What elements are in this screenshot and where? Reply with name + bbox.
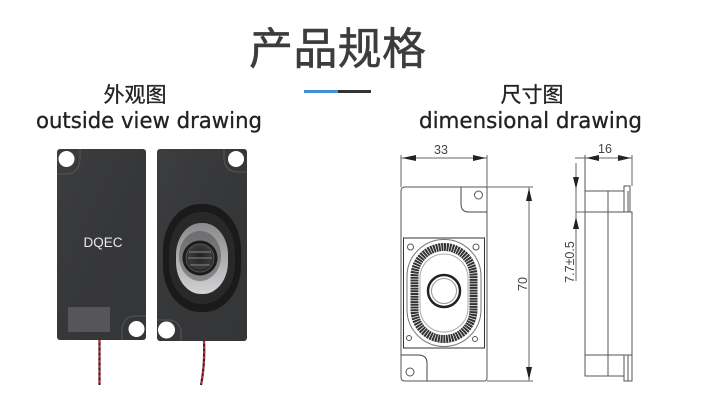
depth dimension: 7.7±0.5: [563, 241, 577, 283]
height dimension: [487, 187, 533, 381]
heading: dimensional: [419, 84, 642, 134]
mounting holes: [58, 151, 74, 167]
speaker front view: [157, 149, 247, 385]
depth dimension: [563, 163, 585, 283]
width dimension: 33: [434, 143, 448, 157]
outline: [585, 155, 632, 381]
width dimension: 16: [598, 142, 612, 156]
body: [157, 149, 247, 341]
heading: dimensional: 尺寸图: [500, 84, 564, 107]
wire: [201, 341, 204, 385]
sticker: [68, 307, 110, 332]
dimension drawing: side: [563, 142, 632, 381]
height dimension: 70: [516, 277, 530, 291]
outline: [401, 187, 487, 381]
heading: dimensional: dimensional drawing: [419, 109, 642, 134]
brand label: DQEC: [83, 235, 123, 250]
body: [57, 149, 146, 340]
speaker outline: [404, 238, 484, 348]
dimension drawing: front: [401, 143, 533, 381]
mounting holes: [228, 151, 244, 167]
heading: outside view: 外观图: [104, 84, 166, 107]
wire: [98, 340, 101, 385]
heading: outside view: [36, 84, 262, 134]
width dimension: [575, 142, 632, 186]
speaker cone: [163, 204, 241, 312]
heading: outside view: outside view drawing: [36, 109, 262, 134]
width dimension: [401, 143, 487, 187]
title: 产品规格: [249, 25, 426, 74]
title underline: [304, 90, 371, 93]
speaker back view: [57, 149, 146, 385]
